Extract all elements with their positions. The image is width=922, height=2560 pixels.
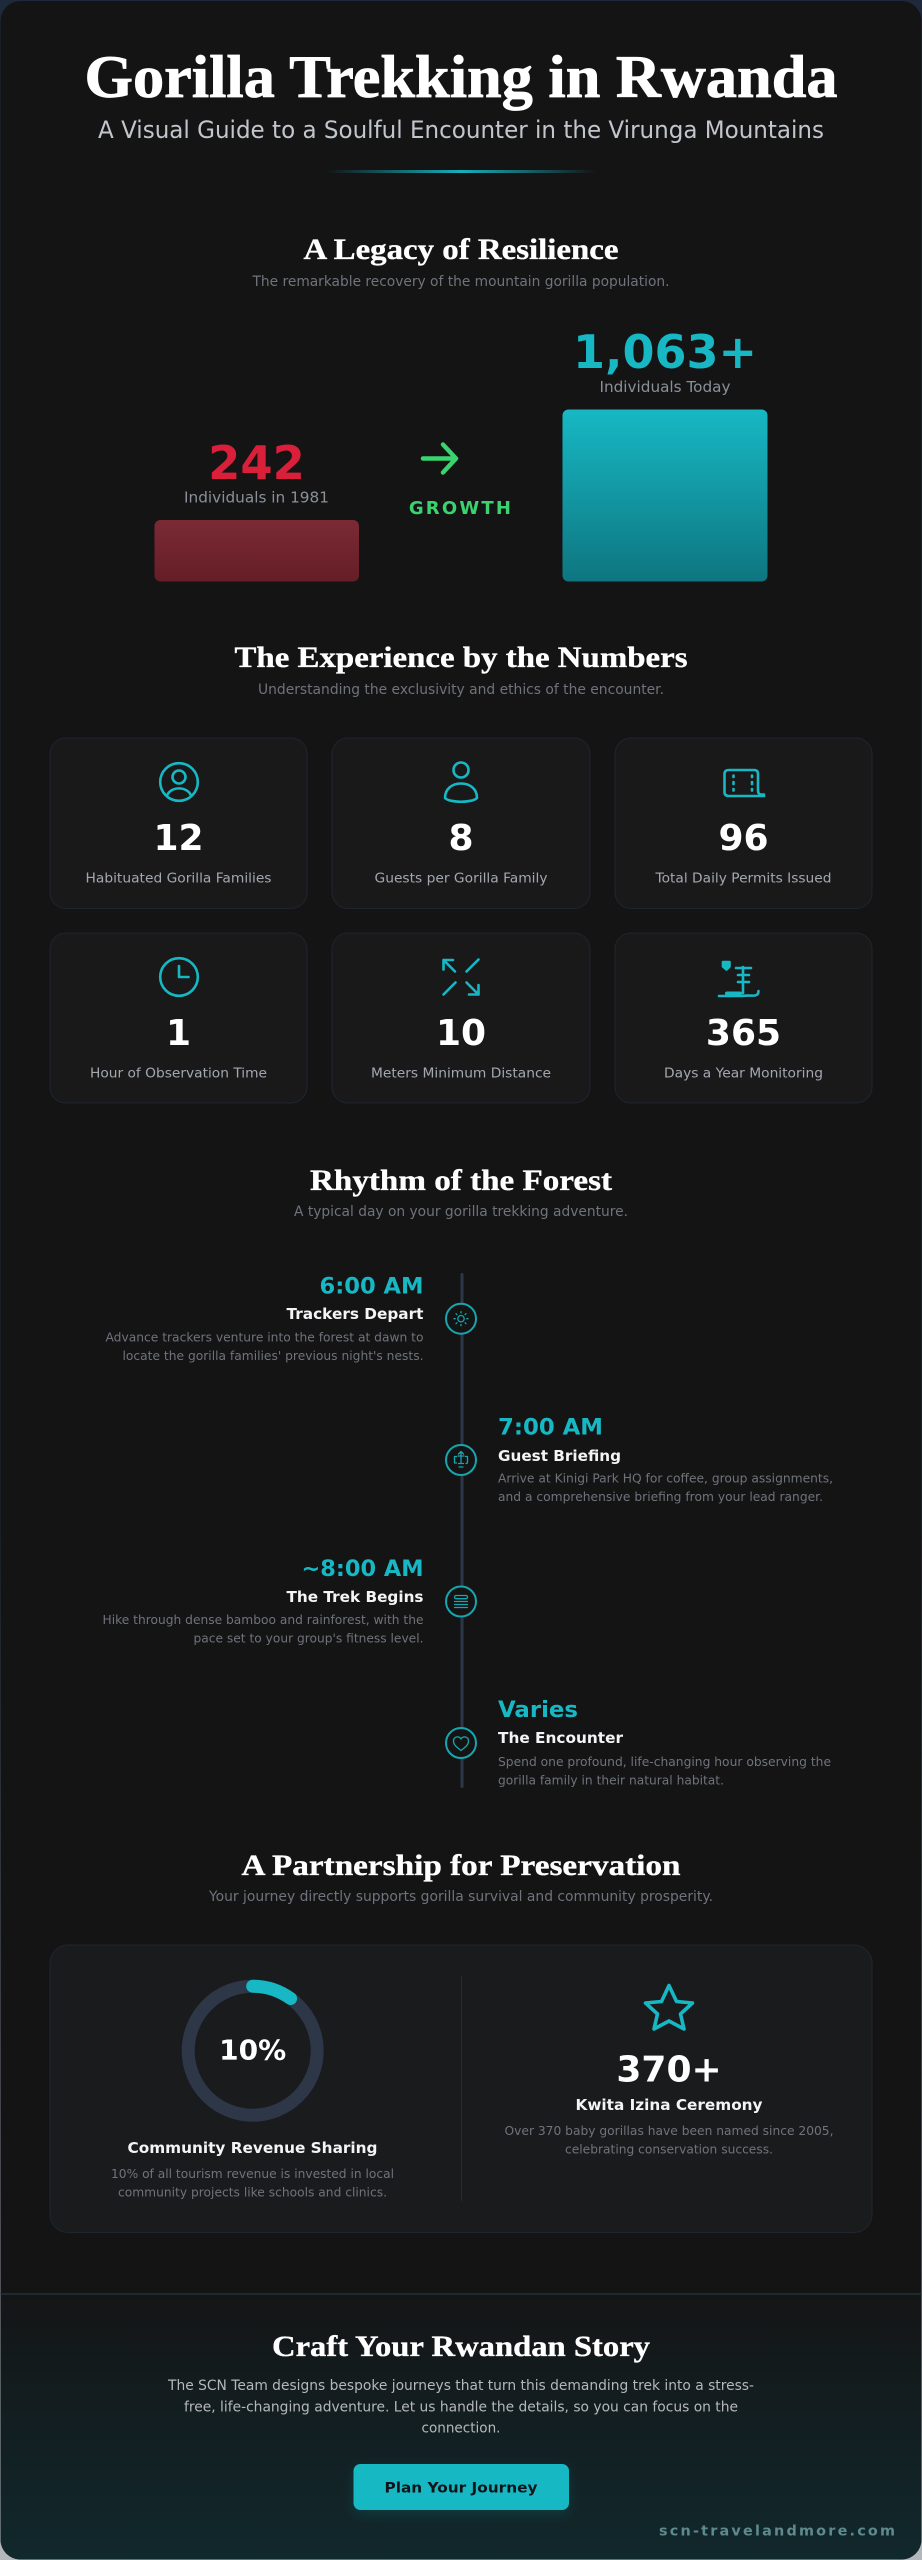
community revenue text [111, 2139, 394, 2200]
stat card: families: Habituated Gorilla Families [86, 872, 272, 886]
partnership panel [50, 1945, 872, 2232]
header [84, 44, 838, 173]
timeline event: varies: The Encounter [498, 1729, 624, 1747]
1981 population column [154, 436, 359, 582]
timeline event: 7:00 AM: Guest Briefing [498, 1447, 621, 1465]
section: a legacy of resilience [154, 233, 768, 582]
stat card: permits: Total Daily Permits Issued [654, 872, 832, 886]
stat card: guests [332, 738, 590, 908]
title: Gorilla Trekking in Rwanda [84, 44, 838, 110]
growth arrow [409, 444, 513, 519]
footer background [0, 2294, 922, 2560]
timeline event: 7:00 AM: and a comprehensive briefing from your lead ranger. [498, 1490, 823, 1505]
timeline event: 6:00 AM: Advance trackers venture into the forest at dawn to [106, 1331, 424, 1346]
kwita izina text: Over 370 baby gorillas have been named since 2005, [504, 2124, 834, 2139]
community revenue text: Community Revenue Sharing [128, 2139, 378, 2157]
footer paragraph [167, 2378, 754, 2437]
subtitle: A Visual Guide to a Soulful Encounter in the Virunga Mountains [98, 116, 824, 144]
timeline event: 6:00 AM: 6:00 AM [320, 1273, 424, 1299]
section subtitle: Your journey directly supports gorilla survival and community prosperity. [208, 1889, 713, 1905]
community revenue text: 10% of all tourism revenue is invested in local [111, 2167, 394, 2182]
timeline event: 7:00 AM [446, 1414, 833, 1505]
button: plan your journey: Plan Your Journey [384, 2480, 538, 2496]
timeline event: varies: gorilla family in their natural habitat. [498, 1773, 724, 1788]
kwita izina text: 370+ [616, 2050, 722, 2091]
section: the experience by the numbers [50, 641, 872, 1103]
donut chart: 10 percent [188, 1986, 317, 2115]
community revenue text: community projects like schools and clinics. [118, 2186, 387, 2200]
timeline event: varies: Spend one profound, life-changing hour observing the [498, 1755, 831, 1770]
timeline event: 6:00 AM: Trackers Depart [286, 1305, 424, 1323]
stat card: permits: 96 [718, 818, 769, 859]
icon: star [646, 1986, 692, 2029]
timeline event: ~8:00 AM: Hike through dense bamboo and rainforest, with the [102, 1613, 424, 1628]
timeline event: varies: Varies [498, 1697, 578, 1723]
footer paragraph: The SCN Team designs bespoke journeys that turn this demanding trek into a stress- [167, 2378, 754, 2394]
heading: A Partnership for Preservation [242, 1849, 681, 1882]
timeline axis [460, 1273, 464, 1788]
donut chart: 10 percent: 10% [219, 2034, 286, 2066]
heading: The Experience by the Numbers [234, 641, 688, 674]
header divider [326, 170, 596, 173]
timeline event: ~8:00 AM: ~8:00 AM [302, 1556, 424, 1582]
footer paragraph: free, life-changing adventure. Let us handle the details, so you can focus on the [184, 2400, 738, 2416]
stat card: permits [615, 738, 872, 908]
footer paragraph: connection. [422, 2421, 500, 2437]
growth arrow: GROWTH [409, 498, 513, 519]
timeline event: ~8:00 AM: The Trek Begins [286, 1588, 424, 1606]
stat card: distance [332, 933, 590, 1103]
kwita izina text [504, 2050, 834, 2158]
section subtitle: Understanding the exclusivity and ethics of the encounter. [258, 682, 664, 698]
stat card: families: 12 [153, 818, 204, 859]
heading: Rhythm of the Forest [310, 1164, 612, 1197]
footer call to action [0, 2294, 922, 2560]
section subtitle: A typical day on your gorilla trekking adventure. [294, 1204, 628, 1220]
timeline event: 7:00 AM: 7:00 AM [498, 1414, 603, 1440]
kwita izina text: Kwita Izina Ceremony [576, 2096, 763, 2114]
section: rhythm of the forest [102, 1164, 833, 1788]
1981 population column: 242 [208, 436, 305, 490]
stat card: families [50, 738, 307, 908]
timeline event: ~8:00 AM: pace set to your group's fitness level. [194, 1632, 424, 1646]
stat card: distance: 10 [436, 1013, 486, 1054]
stat card: guests: Guests per Gorilla Family [374, 872, 548, 886]
heading: A Legacy of Resilience [304, 233, 618, 266]
footer top line [0, 2294, 922, 2295]
stat card: hour: Hour of Observation Time [90, 1066, 267, 1082]
button: plan your journey [354, 2464, 569, 2510]
stat card: hour: 1 [166, 1013, 191, 1054]
kwita izina text: celebrating conservation success. [565, 2142, 773, 2158]
stat card: monitoring: 365 [706, 1013, 781, 1054]
footer heading: Craft Your Rwandan Story [272, 2330, 650, 2363]
website watermark: scn-travelandmore.com [659, 2524, 895, 2540]
timeline event: 7:00 AM: Arrive at Kinigi Park HQ for coffee, group assignments, [498, 1472, 833, 1487]
stat card: monitoring [615, 933, 872, 1103]
panel divider [461, 1976, 462, 2201]
today population column: Individuals Today [600, 378, 731, 396]
timeline event: ~8:00 AM [102, 1556, 476, 1646]
1981 population column: Individuals in 1981 [184, 488, 329, 506]
stat card: monitoring: Days a Year Monitoring [664, 1066, 823, 1082]
timeline event: varies [446, 1697, 831, 1788]
section: a partnership for preservation [50, 1849, 872, 2232]
stat card: guests: 8 [448, 818, 474, 859]
section subtitle: The remarkable recovery of the mountain gorilla population. [252, 274, 670, 290]
stat card: hour [50, 933, 307, 1103]
today population column: 1,063+ [573, 325, 757, 379]
today population column [562, 325, 768, 582]
timeline event: 6:00 AM [106, 1273, 476, 1364]
stat card: distance: Meters Minimum Distance [371, 1066, 551, 1082]
timeline event: 6:00 AM: locate the gorilla families' previous night's nests. [122, 1349, 424, 1364]
